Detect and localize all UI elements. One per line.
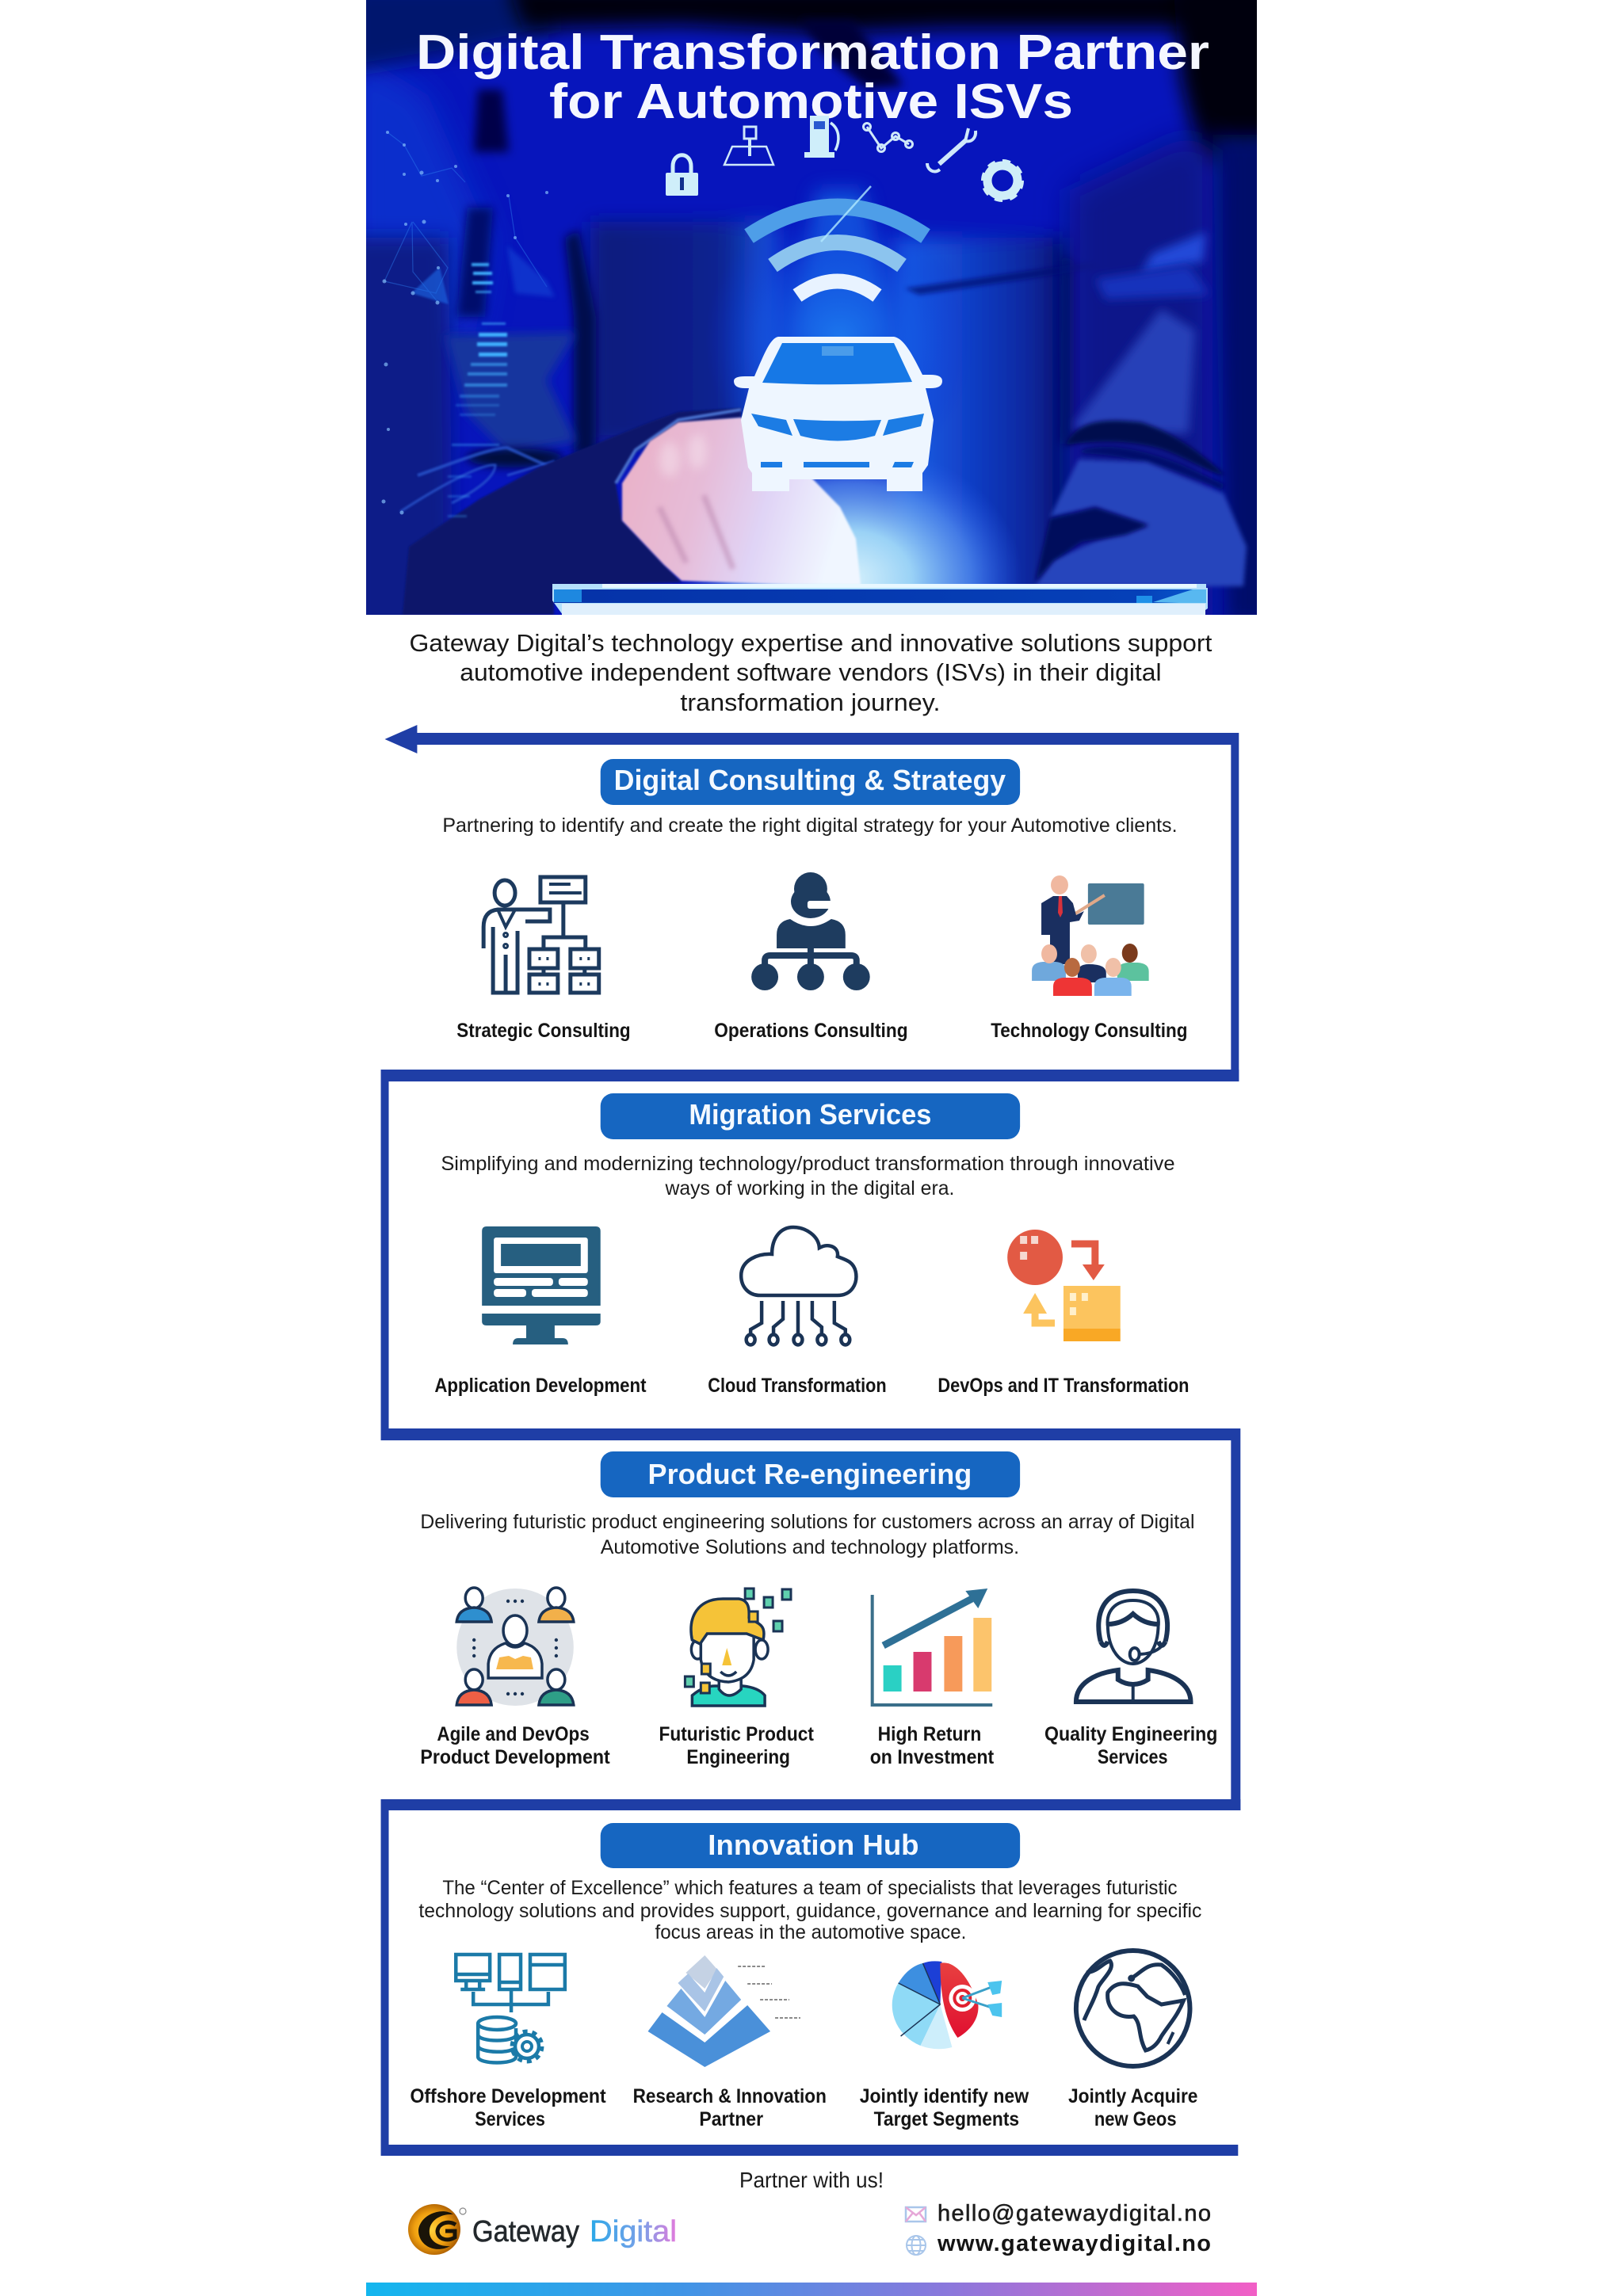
frame — [381, 1799, 1240, 2156]
label: Quality Engineering — [1044, 1723, 1217, 1745]
icon: high return bar chart — [873, 1589, 992, 1705]
digital sparkles — [384, 132, 547, 303]
label — [1044, 1723, 1217, 1768]
heading pill: Innovation Hub — [708, 1829, 919, 1861]
icon: quality engineering headset person — [1076, 1591, 1190, 1702]
description: ways of working in the digital era. — [664, 1177, 954, 1199]
label: on Investment — [870, 1746, 994, 1768]
label — [420, 1723, 610, 1768]
label: Product Development — [420, 1746, 610, 1768]
description: Simplifying and modernizing technology/product transformation through innovative — [441, 1153, 1175, 1175]
description: Partnering to identify and create the right digital strategy for your Automotive clients. — [442, 814, 1178, 837]
label: Technology Consulting — [991, 1020, 1187, 1042]
hand — [622, 418, 861, 585]
frame — [381, 1428, 1240, 1810]
sleeve — [403, 408, 741, 615]
icon: globe — [1076, 1951, 1190, 2066]
logo wordmark: Gateway — [472, 2215, 579, 2248]
description — [441, 1153, 1175, 1199]
label: Jointly Acquire — [1068, 2085, 1198, 2107]
label — [860, 2085, 1029, 2130]
label: Services — [475, 2108, 545, 2130]
panel: product re-engineering — [381, 1428, 1240, 1810]
call to action text: Partner with us! — [739, 2168, 884, 2192]
intro text — [409, 629, 1212, 716]
label: Partner — [699, 2108, 763, 2130]
logo emblem — [408, 2204, 466, 2255]
logo wordmark colored: Digital — [590, 2215, 677, 2248]
windshield — [762, 343, 912, 384]
heading pill: Product Re-engineering — [648, 1458, 972, 1490]
icon: padlock — [666, 155, 698, 196]
icon: wifi signal — [749, 186, 926, 296]
icon: fuel pump — [804, 116, 838, 158]
icon: application development monitor — [482, 1226, 601, 1344]
description: focus areas in the automotive space. — [655, 1921, 966, 1943]
frame with left-pointing arrow — [385, 725, 1239, 1081]
icon: operations consulting — [751, 872, 870, 990]
heading pill — [601, 759, 1020, 805]
icon: wrench — [927, 128, 976, 171]
icon: research pyramid — [648, 1955, 800, 2067]
panel: innovation hub — [381, 1799, 1240, 2156]
label: Engineering — [686, 1746, 790, 1768]
icon: strategic consulting — [483, 877, 599, 993]
icon: car — [734, 337, 942, 491]
label: High Return — [878, 1723, 981, 1745]
description: Delivering futuristic product engineering solutions for customers across an array of Digital — [420, 1511, 1194, 1533]
intro text: Gateway Digital’s technology expertise and innovative solutions support — [409, 629, 1212, 657]
panel: digital consulting and strategy — [385, 725, 1239, 1081]
contact email: hello@gatewaydigital.no — [938, 2201, 1211, 2226]
label — [410, 2085, 606, 2130]
description — [420, 1511, 1194, 1558]
label — [870, 1723, 994, 1768]
label — [633, 2085, 827, 2130]
icon: line chart nodes — [864, 124, 913, 152]
icon: target segments pie and darts — [892, 1961, 1002, 2049]
label: Futuristic Product — [659, 1723, 814, 1745]
icon: cloud transformation — [741, 1227, 856, 1345]
icon: offshore development devices and database — [456, 1955, 565, 2063]
frame — [381, 1070, 1239, 1428]
label: Agile and DevOps — [437, 1723, 590, 1745]
right chest and arm tones — [896, 238, 1070, 626]
heading pill — [601, 1451, 1020, 1497]
label: Operations Consulting — [714, 1020, 908, 1042]
heading pill — [601, 1823, 1020, 1868]
icon: technology consulting — [1032, 875, 1149, 996]
icon: globe web — [907, 2236, 926, 2255]
label: Strategic Consulting — [456, 1020, 631, 1042]
label: Jointly identify new — [860, 2085, 1029, 2107]
label: DevOps and IT Transformation — [938, 1375, 1189, 1397]
icon: devops transformation — [1007, 1230, 1121, 1341]
intro text: automotive independent software vendors (ISVs) in their digital — [460, 658, 1162, 686]
heading pill: Migration Services — [689, 1098, 931, 1131]
hero image panel — [366, 0, 1257, 615]
panel: migration services — [381, 1070, 1239, 1428]
description — [418, 1877, 1201, 1943]
title: for Automotive ISVs — [549, 74, 1073, 129]
cuff fold loops — [400, 448, 564, 512]
icon: parking gear shift — [724, 127, 773, 165]
heading pill — [601, 1093, 1020, 1139]
icon: gear — [983, 162, 1022, 200]
icon: agile and devops team — [456, 1588, 574, 1706]
heading pill: Digital Consulting & Strategy — [614, 764, 1006, 796]
headlights and grille — [751, 414, 924, 467]
contact website: www.gatewaydigital.no — [937, 2231, 1211, 2256]
left jacket tones — [366, 68, 481, 332]
icon: futuristic product engineering — [685, 1589, 791, 1706]
label: Offshore Development — [410, 2085, 606, 2107]
label: new Geos — [1094, 2108, 1177, 2130]
description: The “Center of Excellence” which features a team of specialists that leverages futuristic — [442, 1877, 1178, 1899]
intro text: transformation journey. — [680, 688, 940, 716]
label: Cloud Transformation — [708, 1375, 887, 1397]
label: Application Development — [434, 1375, 647, 1397]
icon: mail — [906, 2207, 926, 2222]
label — [1068, 2085, 1198, 2130]
footer gradient bar — [366, 2283, 1257, 2296]
label: Services — [1098, 1746, 1168, 1768]
title: Digital Transformation Partner — [416, 25, 1209, 80]
label — [659, 1723, 814, 1768]
tablet — [552, 584, 1208, 615]
description: Automotive Solutions and technology platforms. — [601, 1536, 1019, 1558]
title — [416, 25, 1209, 129]
label: Target Segments — [874, 2108, 1019, 2130]
logo: gateway digital — [408, 2204, 677, 2255]
description: technology solutions and provides support, guidance, governance and learning for specific — [418, 1900, 1201, 1922]
label: Research & Innovation — [633, 2085, 827, 2107]
